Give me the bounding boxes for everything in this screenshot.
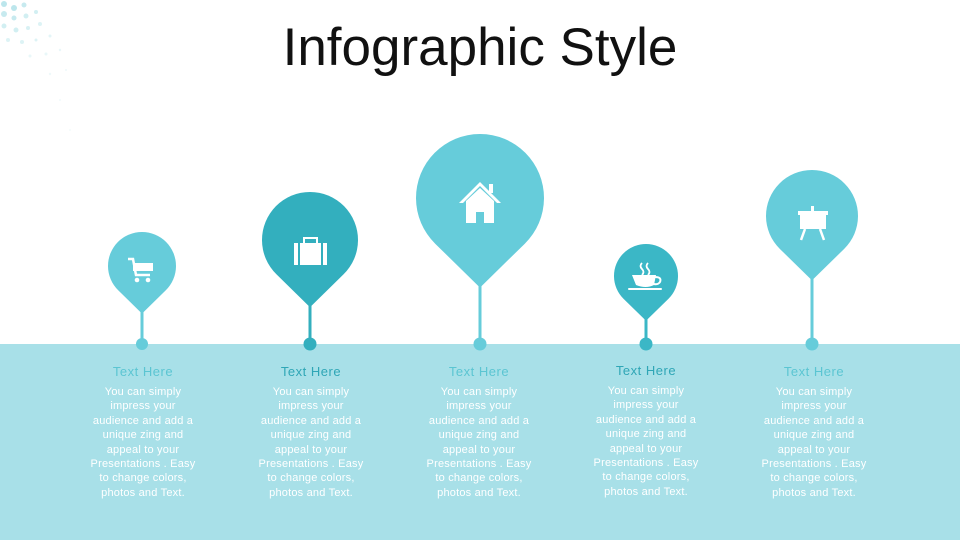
decorative dot pattern <box>1 1 71 131</box>
column 4 text: Presentations . Easy <box>594 457 698 469</box>
column 3 text <box>427 364 532 499</box>
column 1 text: Presentations . Easy <box>91 458 195 470</box>
column 5 text: Text Here <box>784 364 844 379</box>
pin 1: cart <box>108 232 176 350</box>
column 3 text: photos and Text. <box>437 487 521 499</box>
column 3 text: appeal to your <box>443 444 515 456</box>
column 4 text: photos and Text. <box>604 486 688 498</box>
column 2 text: to change colors, <box>267 472 355 484</box>
column 4 text: impress your <box>613 399 679 411</box>
pin 2: briefcase <box>262 192 358 350</box>
column 2 text: Presentations . Easy <box>259 458 363 470</box>
column 3 text: impress your <box>446 400 512 412</box>
column 1 text: impress your <box>110 400 176 412</box>
column 1 text <box>91 364 196 499</box>
column 4 text: You can simply <box>608 385 684 397</box>
column 2 text: impress your <box>278 400 344 412</box>
pin 4: coffee cup <box>614 244 678 350</box>
column 5 text: You can simply <box>776 386 852 398</box>
column 5 text: photos and Text. <box>772 487 856 499</box>
column 4 text: Text Here <box>616 363 676 378</box>
column 3 text: audience and add a <box>429 415 529 427</box>
pin 3: house <box>416 134 544 350</box>
column 2 text: Text Here <box>281 364 341 379</box>
column 4 text: audience and add a <box>596 414 696 426</box>
column 5 text: to change colors, <box>770 472 858 484</box>
column 5 text: impress your <box>781 400 847 412</box>
column 5 text: unique zing and <box>774 429 854 441</box>
column 3 text: Text Here <box>449 364 509 379</box>
column 4 text <box>594 363 698 498</box>
column 2 text: You can simply <box>273 386 349 398</box>
column 3 text: to change colors, <box>435 472 523 484</box>
column 3 text: Presentations . Easy <box>427 458 531 470</box>
title: Infographic Style <box>283 18 677 77</box>
column 2 text <box>259 364 364 499</box>
column 5 text <box>762 364 866 499</box>
column 2 text: photos and Text. <box>269 487 353 499</box>
column 4 text: appeal to your <box>610 443 682 455</box>
column 4 text: unique zing and <box>606 428 686 440</box>
pin 5: presentation board <box>766 170 858 350</box>
column 1 text: appeal to your <box>107 444 179 456</box>
column 5 text: Presentations . Easy <box>762 458 866 470</box>
column 1 text: photos and Text. <box>101 487 185 499</box>
column 1 text: Text Here <box>113 364 173 379</box>
column 4 text: to change colors, <box>602 471 690 483</box>
column 2 text: audience and add a <box>261 415 361 427</box>
column 3 text: You can simply <box>441 386 517 398</box>
column 1 text: to change colors, <box>99 472 187 484</box>
column 2 text: appeal to your <box>275 444 347 456</box>
column 1 text: audience and add a <box>93 415 193 427</box>
column 2 text: unique zing and <box>271 429 351 441</box>
column 5 text: audience and add a <box>764 415 864 427</box>
bottom band <box>0 344 960 540</box>
column 1 text: You can simply <box>105 386 181 398</box>
column 5 text: appeal to your <box>778 444 850 456</box>
column 3 text: unique zing and <box>439 429 519 441</box>
column 1 text: unique zing and <box>103 429 183 441</box>
